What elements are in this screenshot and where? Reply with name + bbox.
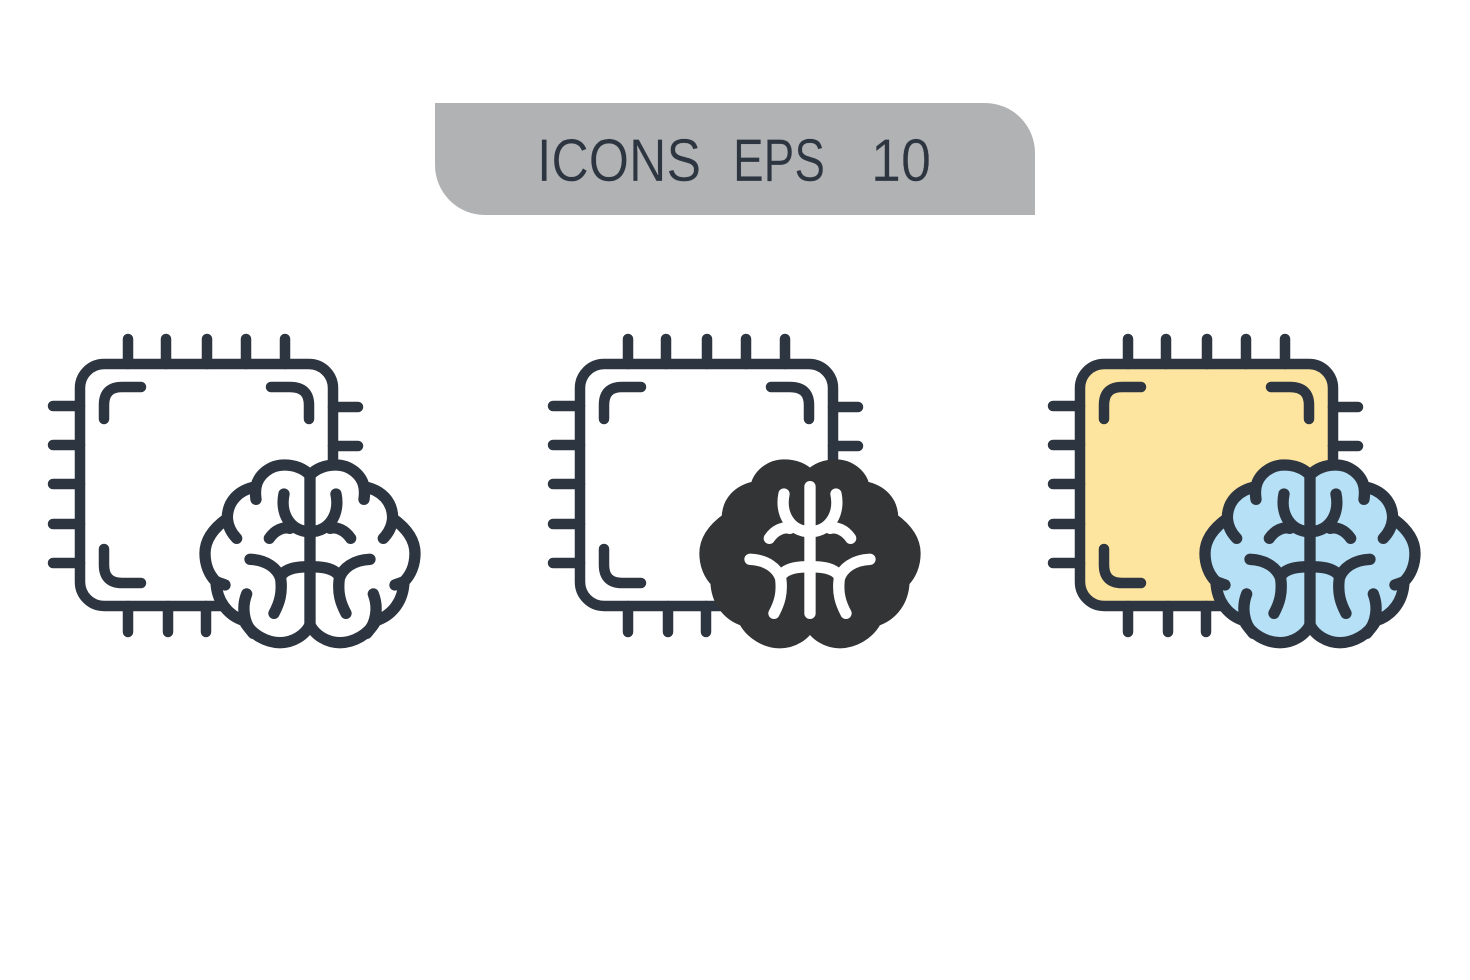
icon: coloured chip with brain	[1053, 339, 1415, 643]
banner heading	[537, 127, 931, 194]
chip	[53, 339, 358, 632]
banner heading: 10	[871, 127, 931, 194]
banner heading: ICONS	[537, 127, 701, 194]
icon: solid brain chip	[553, 339, 915, 643]
blue brain	[1205, 465, 1415, 643]
brain outline	[205, 465, 415, 643]
icon: outline chip with brain	[53, 339, 415, 643]
yellow chip	[1053, 339, 1358, 632]
banner background	[435, 103, 1035, 215]
banner heading: EPS	[733, 127, 825, 194]
banner: icons eps 10	[435, 103, 1035, 215]
solid brain	[705, 465, 915, 643]
chip	[553, 339, 858, 632]
